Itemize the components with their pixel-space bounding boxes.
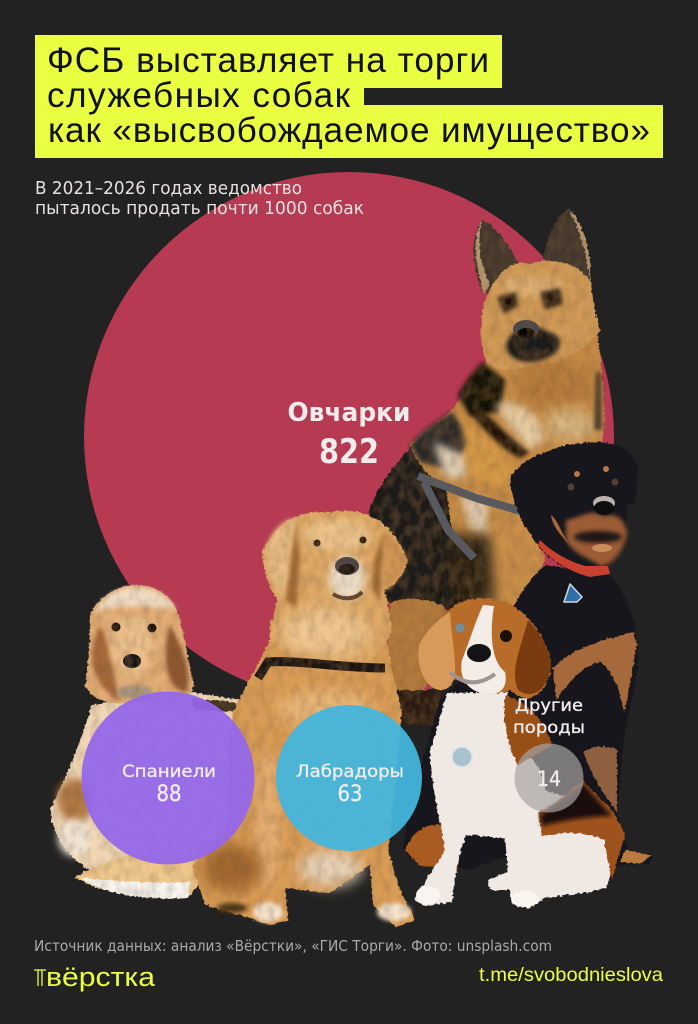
title line 3: как «высвобождаемое имущество» <box>48 111 650 150</box>
circle: other breeds <box>513 696 585 812</box>
dog: german shepherd <box>368 209 604 726</box>
harness <box>418 476 524 558</box>
subtitle: В 2021–2026 годах ведомство <box>35 178 302 199</box>
dog: golden retriever <box>75 511 415 927</box>
label: labradors: Лабрадоры <box>296 762 404 782</box>
label: other breeds: породы <box>513 718 585 738</box>
label: labradors: 63 <box>338 782 362 807</box>
dog: beagle <box>414 599 625 908</box>
title line 2: служебных собак <box>47 76 351 115</box>
dog: rottweiler <box>403 442 653 870</box>
label: spaniels: Спаниели <box>122 762 216 782</box>
subtitle: пыталось продать почти 1000 собак <box>35 198 364 219</box>
title highlight <box>35 35 663 158</box>
link: t.me/svobodnieslova <box>479 965 663 986</box>
label: other breeds <box>513 696 585 791</box>
label: spaniels: 88 <box>156 782 182 807</box>
label: spaniels <box>122 762 216 807</box>
circle: spaniels <box>82 692 254 864</box>
label: shepherds <box>288 398 410 472</box>
label: other breeds: Другие <box>515 696 583 716</box>
source note: Источник данных: анализ «Вёрстки», «ГИС Торги». Фото: unsplash.com <box>34 937 552 955</box>
big circle: shepherds <box>84 172 614 702</box>
logo: вёрстка <box>46 962 156 992</box>
dog: spaniel <box>50 585 240 870</box>
circle: labradors <box>276 705 422 851</box>
label: shepherds: Овчарки <box>288 398 410 428</box>
title line 1: ФСБ выставляет на торги <box>47 41 489 80</box>
label: labradors <box>296 762 404 807</box>
harness <box>258 662 385 678</box>
label: shepherds: 822 <box>319 432 379 472</box>
subtitle <box>35 178 364 219</box>
title <box>35 35 663 158</box>
label: other breeds: 14 <box>537 767 561 791</box>
